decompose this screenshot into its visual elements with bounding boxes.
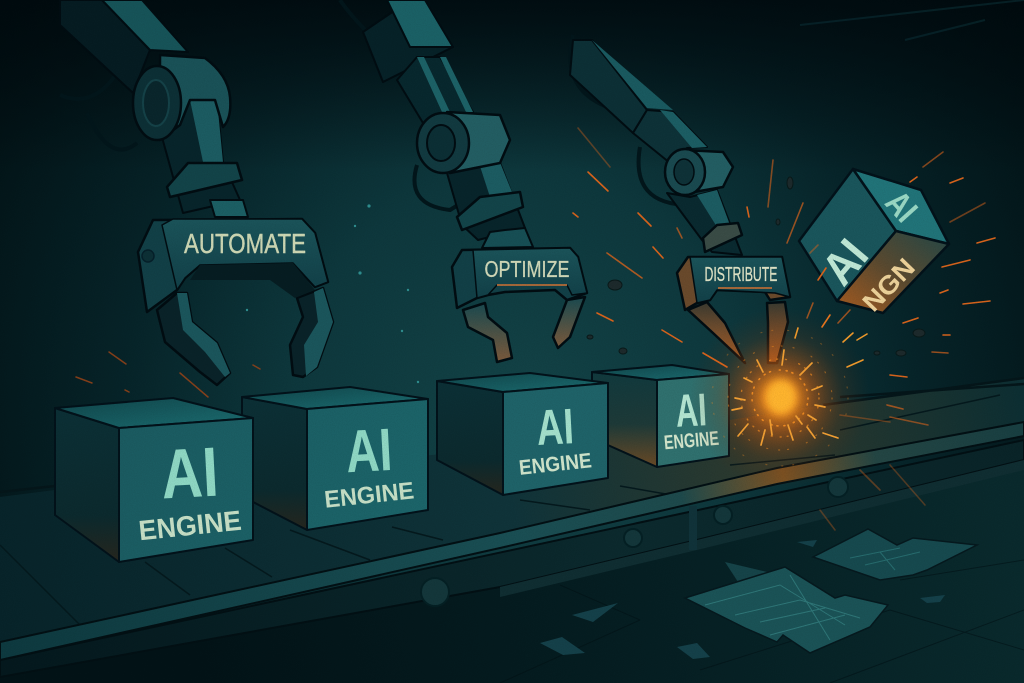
box 2 label: ENGINE <box>323 477 415 514</box>
paper scraps <box>540 540 945 659</box>
arm 1 lower plate <box>210 200 248 217</box>
belt bolts <box>421 477 848 606</box>
arm 2 label: OPTIMIZE <box>484 256 570 282</box>
cube left face <box>799 169 896 301</box>
arm 2 left finger <box>463 303 512 362</box>
cube labels: AI <box>811 229 878 295</box>
paper sheet small <box>813 529 977 580</box>
arm 1 joint <box>160 55 230 140</box>
arm 1 label: AUTOMATE <box>184 228 306 259</box>
robot arm 3 <box>570 35 790 363</box>
arm 2 upper link <box>387 0 453 47</box>
belt front rail <box>0 422 1024 660</box>
cube labels <box>811 184 925 317</box>
arm 2 neck <box>447 155 525 240</box>
housing under the belt <box>0 440 1024 677</box>
box 4 label: AI <box>674 383 708 437</box>
arm 3 left finger <box>688 302 745 363</box>
spark particles <box>712 330 848 466</box>
arm 3 right finger <box>767 302 788 363</box>
cube bottom face <box>837 231 949 313</box>
box 2 label: AI <box>344 416 394 485</box>
arm 2 gripper yoke <box>452 248 587 308</box>
housing post <box>689 506 697 550</box>
upper-right pipes <box>800 0 1024 40</box>
spark burst glow <box>690 308 870 488</box>
flying cube <box>799 169 949 317</box>
box 2 side <box>242 397 307 530</box>
box 2 <box>242 387 428 530</box>
arm 3 joint <box>683 150 733 193</box>
box 4 label <box>663 383 720 454</box>
arm 1 cables <box>60 0 137 150</box>
arm 3 gripper yoke <box>677 257 790 310</box>
spark core <box>766 380 796 414</box>
arm 1 left finger <box>157 293 230 385</box>
box 3 label <box>518 398 593 480</box>
housing lower bar <box>500 460 1024 597</box>
box 3 label: AI <box>535 398 575 456</box>
box 2 front <box>307 399 428 530</box>
box 1 top <box>55 398 253 428</box>
arm 3 neck <box>667 190 742 255</box>
cube labels: AI <box>878 184 925 230</box>
box 1 label: AI <box>159 433 220 513</box>
arm 1 collar <box>167 163 242 197</box>
arm 3 collar <box>703 223 742 252</box>
conveyor belt <box>0 378 1024 677</box>
box 4 label: ENGINE <box>663 428 720 454</box>
cube top-right face <box>853 169 949 244</box>
arm 3 second link <box>633 110 707 163</box>
box 3 label: ENGINE <box>518 449 593 480</box>
arm 2 joint <box>447 112 510 173</box>
box 2 label <box>323 416 415 514</box>
arm 1 right finger <box>290 288 333 377</box>
belt surface <box>0 378 1024 642</box>
arm 3 cables <box>570 35 690 205</box>
arm 3 upper link <box>570 40 647 133</box>
box 1 side <box>55 408 119 562</box>
robot arm 1 <box>60 0 333 385</box>
arm 1 gripper yoke <box>138 219 328 312</box>
faint sparks near box 1 <box>76 352 260 397</box>
floor <box>0 440 1024 683</box>
box 1 <box>55 398 253 562</box>
arm 1 neck <box>160 100 240 213</box>
cube labels: NGN <box>856 252 921 317</box>
debris <box>587 177 925 356</box>
box 3 top <box>437 373 608 392</box>
box 1 label <box>137 433 243 546</box>
arm 2 collar <box>457 192 523 230</box>
arm 1 upper link <box>60 0 150 93</box>
paper sheet large <box>685 567 888 653</box>
box 4 top <box>592 365 729 380</box>
arm 2 cables <box>340 0 458 210</box>
box 3 front <box>503 383 608 495</box>
arm 2 dark rear link <box>363 0 453 82</box>
paper curled corner <box>725 562 767 585</box>
box 1 front <box>119 418 253 562</box>
box 4 side <box>592 372 657 467</box>
box 4 <box>592 365 729 467</box>
arm 2 right finger <box>553 297 585 348</box>
box 4 front <box>657 374 729 467</box>
box 3 side <box>437 381 503 495</box>
robot arm 2 <box>340 0 587 362</box>
arm 2 lower plate <box>482 228 533 248</box>
box 1 label: ENGINE <box>137 505 243 546</box>
box 2 top <box>242 387 428 409</box>
glints on wall <box>246 204 419 383</box>
burst rays <box>732 350 838 445</box>
sparks <box>573 128 995 530</box>
box 3 <box>437 373 608 495</box>
arm 3 label: DISTRIBUTE <box>704 264 778 286</box>
